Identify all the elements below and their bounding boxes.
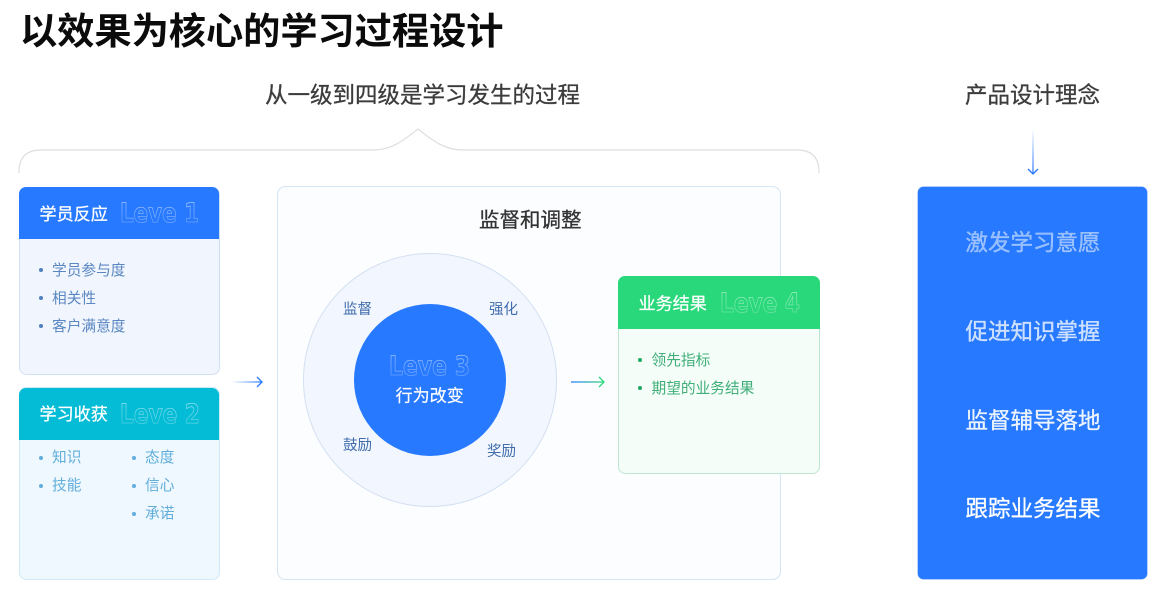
level 2 list: 态度 (145, 449, 175, 466)
level 4 tag: Leve 4 (720, 288, 800, 319)
level 1 heading: 学员反应 (40, 205, 108, 224)
concept 2: 促进知识掌握 (966, 320, 1101, 344)
concept 4: 跟踪业务结果 (966, 496, 1101, 522)
panel: level 4 (618, 276, 820, 474)
level 1 list: 学员参与度 (52, 262, 126, 279)
level 2 heading: 学习收获 (40, 405, 108, 424)
panel: level 2 (19, 388, 220, 580)
level 4 list: 期望的业务结果 (652, 380, 755, 397)
level 2 list: 信心 (145, 477, 175, 494)
panel heading: 监督和调整 (479, 209, 582, 232)
level 1 list: 客户满意度 (52, 317, 126, 335)
level 2 list: 承诺 (145, 505, 175, 522)
level 2 list: 知识 (52, 449, 81, 466)
arrow: down to concept panel (1028, 129, 1038, 174)
level 4 list (638, 352, 755, 397)
outer labels (343, 301, 518, 460)
outer labels: 监督 (343, 301, 372, 318)
arrow: to results (571, 377, 604, 387)
inner circle (354, 304, 506, 456)
heading: learning process: 从一级到四级是学习发生的过程 (265, 83, 580, 108)
concept 3: 监督辅导落地 (966, 408, 1101, 434)
outer labels: 鼓励 (343, 437, 372, 454)
heading: product design concept: 产品设计理念 (965, 83, 1100, 108)
title: 以效果为核心的学习过程设计 (20, 10, 503, 52)
panel: monitor and adjust (278, 186, 780, 580)
level 4 list: 领先指标 (652, 352, 711, 369)
level 2 tag: Leve 2 (120, 399, 200, 430)
panel: level 1 (19, 187, 220, 374)
level 4 header (618, 276, 820, 329)
level 1 header (19, 187, 219, 239)
level 2 header (19, 388, 219, 440)
arrow: to behaviour panel (231, 377, 262, 387)
brace (19, 129, 819, 173)
inner label: 行为改变 (396, 386, 464, 406)
level 2 list (39, 449, 175, 522)
panel: product concepts (918, 186, 1148, 580)
level 3 tag: Leve 3 (389, 351, 470, 382)
outer circle (304, 254, 556, 506)
concept 1: 激发学习意愿 (966, 230, 1101, 256)
outer labels: 奖励 (487, 443, 516, 460)
level 1 tag: Leve 1 (120, 198, 199, 229)
level 4 heading: 业务结果 (638, 294, 707, 314)
level 2 list: 技能 (52, 477, 82, 494)
level 1 list: 相关性 (52, 290, 96, 307)
outer labels: 强化 (489, 301, 518, 318)
level 1 list (39, 262, 126, 335)
